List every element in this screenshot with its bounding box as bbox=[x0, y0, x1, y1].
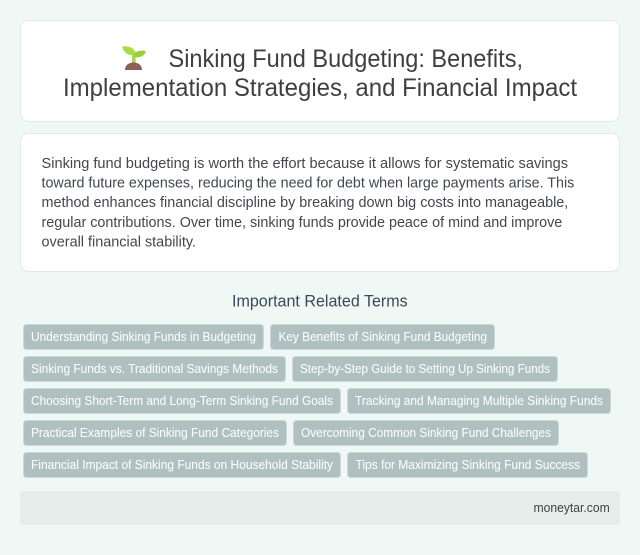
chip: key benefits bbox=[270, 324, 494, 350]
chip: tracking and managing: Tracking and Managing Multiple Sinking Funds bbox=[355, 393, 603, 408]
footer bar bbox=[20, 491, 620, 525]
chip: overcoming challenges bbox=[294, 420, 558, 446]
chip: financial impact: Financial Impact of Sinking Funds on Household Stability bbox=[31, 457, 333, 472]
title line 2: Implementation Strategies, and Financial Impact bbox=[63, 74, 577, 102]
panel: summary text: overall financial stability. bbox=[42, 234, 196, 250]
panel: related term chips bbox=[24, 324, 610, 478]
chip: tips for maximizing bbox=[348, 452, 588, 478]
panel: summary text: method enhances financial discipline by breaking down big costs into manageable, bbox=[42, 195, 568, 211]
chip: practical examples bbox=[24, 420, 286, 446]
chip: tracking and managing bbox=[348, 388, 610, 414]
chip: financial impact bbox=[24, 452, 340, 478]
chip: step-by-step guide: Step-by-Step Guide to Setting Up Sinking Funds bbox=[300, 361, 550, 376]
chip: tips for maximizing: Tips for Maximizing Sinking Fund Success bbox=[356, 457, 580, 472]
heading: important related terms: Important Related Terms bbox=[232, 292, 408, 310]
chip: key benefits: Key Benefits of Sinking Fund Budgeting bbox=[278, 329, 487, 344]
panel: summary text: toward future expenses, reducing the need for debt when large payments arise. This bbox=[42, 176, 574, 192]
panel: summary text: Sinking fund budgeting is worth the effort because it allows for systematic savings bbox=[42, 156, 568, 172]
chip: overcoming challenges: Overcoming Common Sinking Fund Challenges bbox=[301, 425, 551, 440]
chip: choosing goals: Choosing Short-Term and Long-Term Sinking Fund Goals bbox=[31, 393, 333, 408]
chip: practical examples: Practical Examples of Sinking Fund Categories bbox=[31, 425, 279, 440]
chip: choosing goals bbox=[24, 388, 340, 414]
chip: understanding sinking funds bbox=[24, 324, 264, 350]
panel: summary text bbox=[20, 134, 620, 272]
chip: vs traditional savings bbox=[24, 356, 286, 382]
title line 1: Sinking Fund Budgeting: Benefits, bbox=[168, 45, 523, 73]
icon: sprout bbox=[122, 46, 146, 70]
chip: vs traditional savings: Sinking Funds vs. Traditional Savings Methods bbox=[31, 361, 278, 376]
chip: step-by-step guide bbox=[292, 356, 558, 382]
panel: title card bbox=[20, 20, 620, 122]
footer source text: moneytar.com bbox=[534, 500, 610, 515]
chip: understanding sinking funds: Understanding Sinking Funds in Budgeting bbox=[31, 329, 256, 344]
panel: summary text: regular contributions. Over time, sinking funds provide peace of mind and improve bbox=[42, 215, 562, 231]
